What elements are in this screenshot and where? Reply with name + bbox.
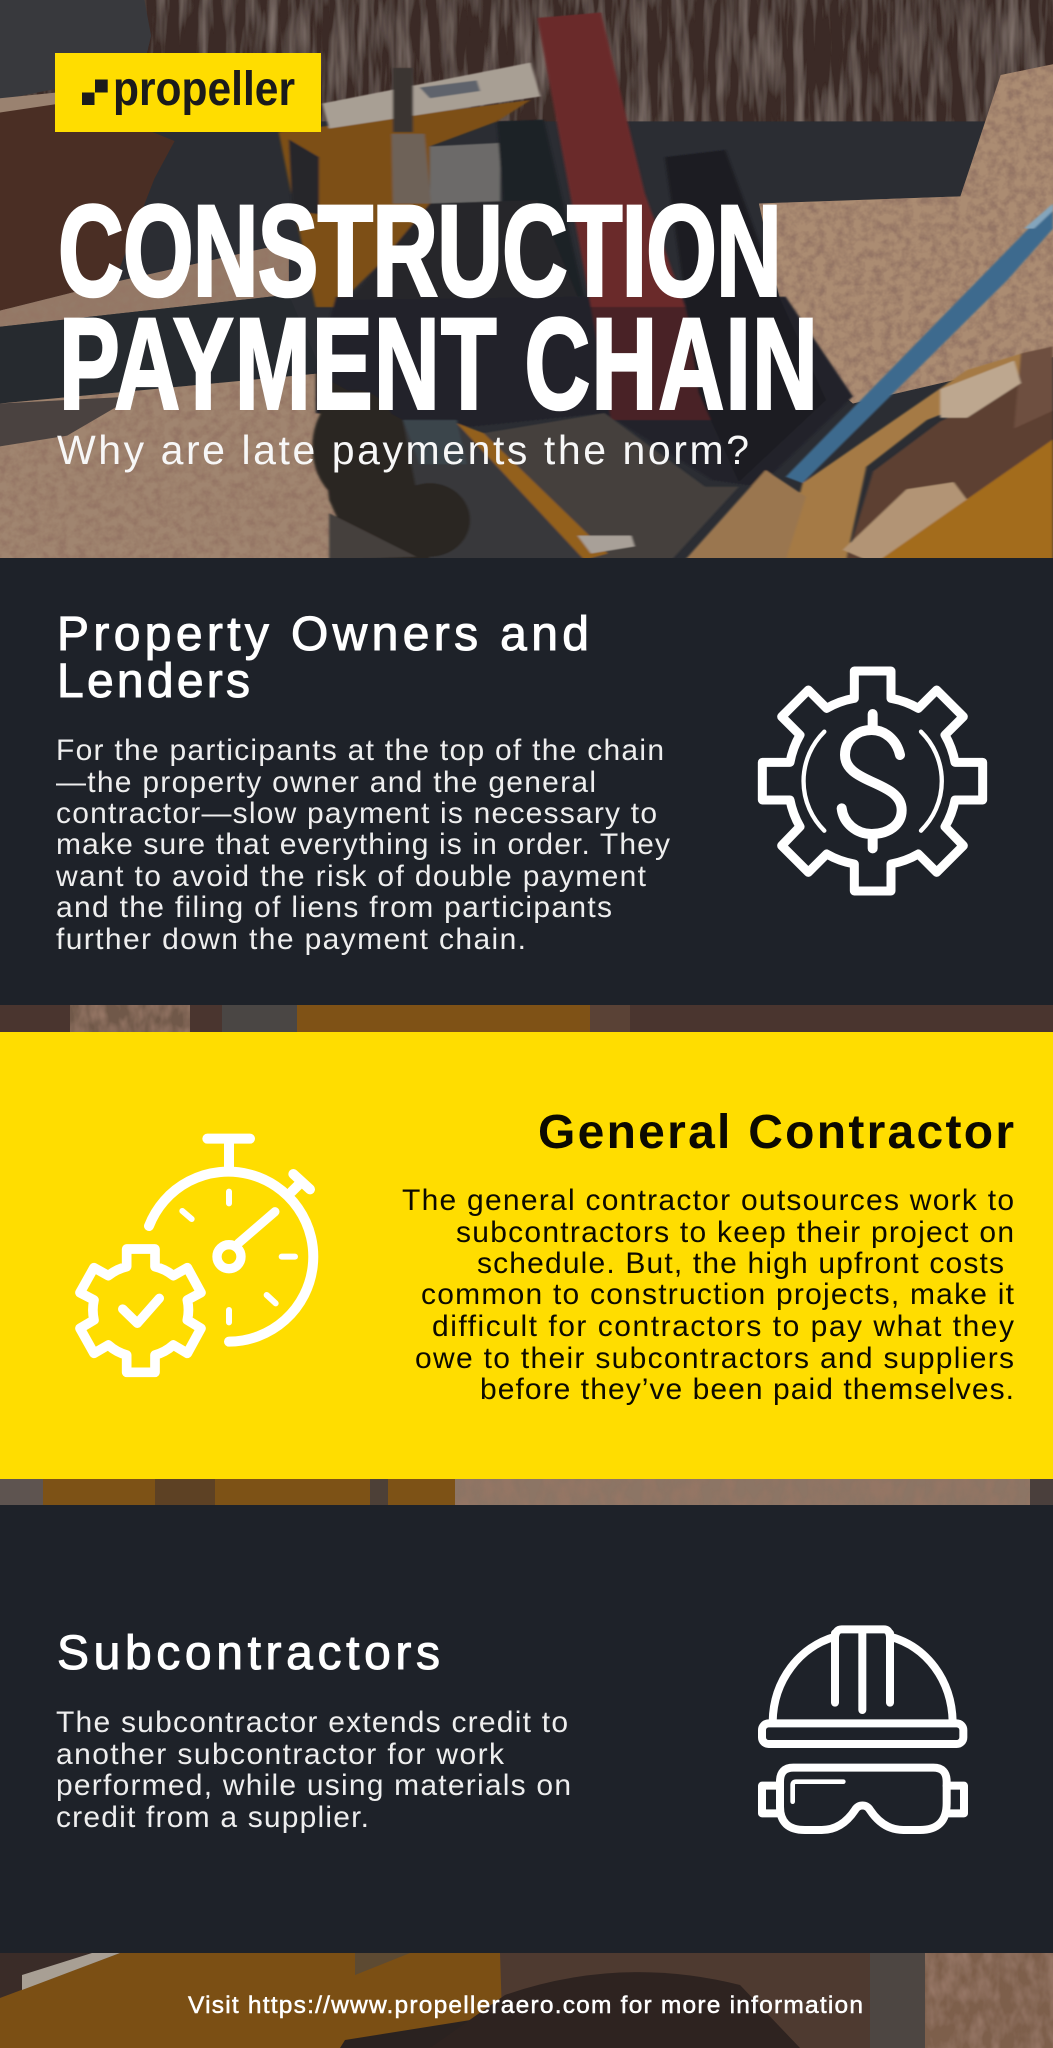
body text: performed, while using materials on — [56, 1769, 571, 1802]
body text — [55, 734, 670, 956]
logo badge — [55, 53, 321, 132]
panel: property owners and lenders — [0, 558, 1053, 1005]
heading: Property Owners and — [57, 608, 589, 661]
body text: and the filing of liens from participants — [56, 891, 612, 924]
body text: owe to their subcontractors and suppliers — [415, 1342, 1014, 1375]
panel: general contractor — [0, 1032, 1053, 1479]
title: CONSTRUCTION — [58, 177, 782, 323]
logo wordmark: propeller — [113, 63, 295, 116]
hero photo: construction site with truck and excavator — [0, 0, 1053, 560]
photo strip between panels 1 and 2 — [0, 1005, 1053, 1032]
icon: hard hat and goggles — [762, 1629, 964, 1830]
heading: Lenders — [57, 655, 250, 708]
heading — [57, 608, 589, 708]
body text: schedule. But, the high upfront costs — [477, 1247, 1004, 1280]
body text: For the participants at the top of the chain — [56, 734, 664, 767]
title — [60, 203, 813, 412]
panel: hero header — [0, 0, 1053, 560]
heading: General Contractor — [538, 1106, 1014, 1159]
title: PAYMENT CHAIN — [59, 290, 818, 436]
body text: difficult for contractors to pay what they — [432, 1310, 1014, 1343]
body text: make sure that everything is in order. They — [56, 828, 670, 861]
body text: further down the payment chain. — [56, 923, 526, 956]
body text: subcontractors to keep their project on — [456, 1216, 1014, 1249]
footer photo band — [0, 1953, 1053, 2048]
photo strip between panels 2 and 3 — [0, 1479, 1053, 1505]
icon: stopwatch and gear with check — [80, 1139, 313, 1372]
body text: —the property owner and the general — [56, 766, 596, 799]
body text: contractor—slow payment is necessary to — [56, 797, 657, 830]
body text: common to construction projects, make it — [421, 1278, 1015, 1311]
body text: The general contractor outsources work to — [402, 1184, 1014, 1217]
body text: The subcontractor extends credit to — [56, 1706, 568, 1739]
icon: gear with dollar sign — [762, 671, 983, 891]
panel: subcontractors — [0, 1505, 1053, 1953]
body text — [402, 1184, 1015, 1406]
body text: want to avoid the risk of double payment — [55, 860, 647, 893]
subtitle: Why are late payments the norm? — [57, 427, 749, 473]
footer text: Visit https://www.propelleraero.com for more information — [188, 1992, 863, 2019]
body text: before they’ve been paid themselves. — [480, 1373, 1014, 1406]
body text: credit from a supplier. — [56, 1801, 369, 1834]
body text: another subcontractor for work — [56, 1738, 505, 1771]
logo mark — [82, 80, 108, 105]
heading: Subcontractors — [57, 1627, 440, 1680]
body text — [56, 1706, 571, 1834]
